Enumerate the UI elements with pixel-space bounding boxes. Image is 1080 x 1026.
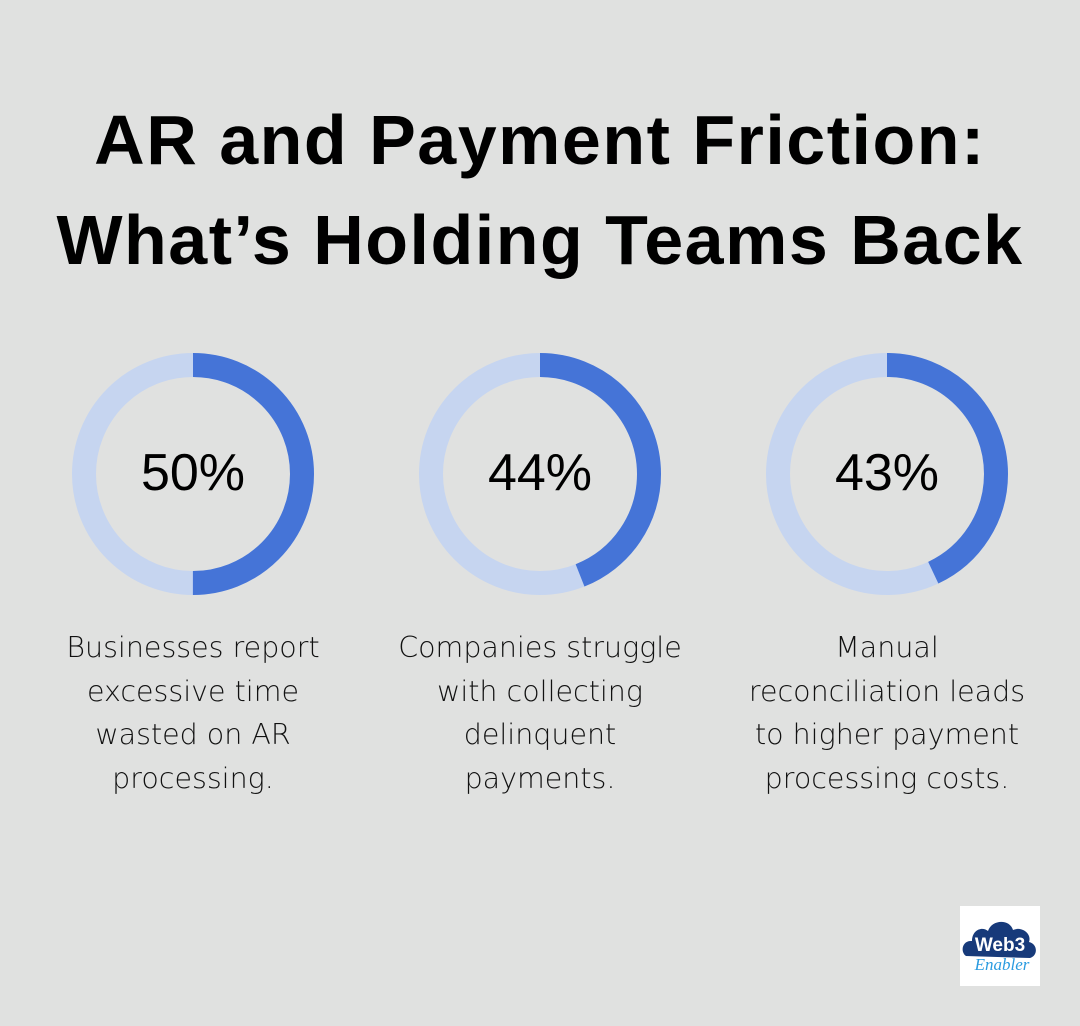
logo [960,906,1040,986]
stat 2 ring [419,353,661,595]
description 1: wasted on AR [95,718,291,751]
title: What’s Holding Teams Back [56,201,1024,279]
description 1 [66,631,320,794]
description 2: with collecting [437,674,643,708]
percent 44: 44% [488,444,592,502]
description 3: Manual [835,631,939,664]
description 2 [398,631,682,794]
description 3: to higher payment [755,718,1019,751]
logo: Enabler [974,955,1030,974]
title: AR and Payment Friction: [94,101,986,179]
description 3: reconciliation leads [749,674,1025,708]
description 2: payments. [465,762,615,794]
description 1: Businesses report [66,631,320,664]
stat 3 ring [766,353,1008,595]
description 1: processing. [112,762,274,794]
stat 1 ring [72,353,314,595]
percent 50: 50% [141,444,245,502]
title [56,101,1024,279]
description 3 [749,631,1025,794]
description 2: delinquent [464,718,616,751]
description 3: processing costs. [765,762,1009,794]
description 2: Companies struggle [398,631,682,664]
logo: Web3 [975,935,1025,956]
percent 43: 43% [835,444,939,502]
description 1: excessive time [87,674,299,708]
